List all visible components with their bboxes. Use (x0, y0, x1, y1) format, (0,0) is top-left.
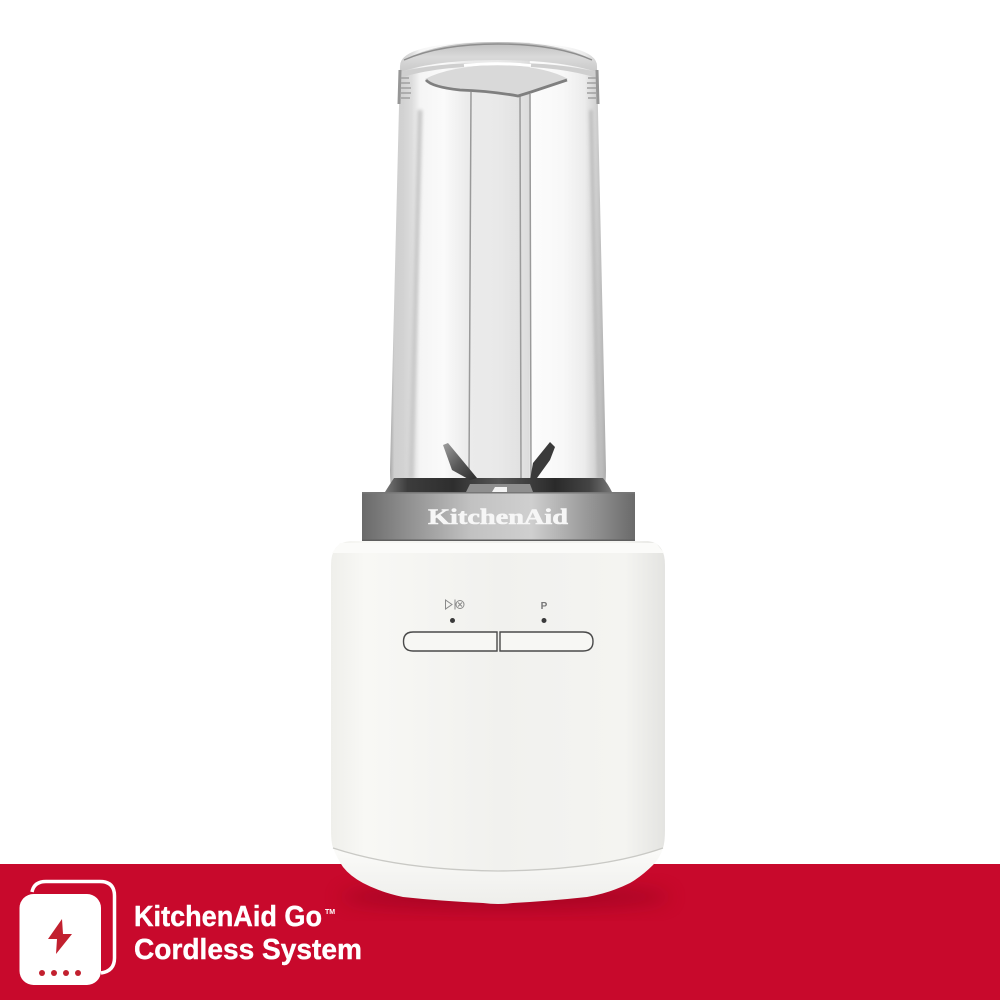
banner title: KitchenAid Go (134, 901, 322, 933)
control buttons (404, 632, 593, 651)
jar rim (400, 42, 597, 72)
control symbols (446, 600, 548, 623)
red banner (0, 864, 1000, 1000)
jar bottom dark band (385, 478, 612, 492)
KitchenAid logo: KitchenAid (428, 504, 568, 529)
metal collar with logo (362, 492, 635, 541)
blender body (331, 541, 665, 904)
blender blades (443, 442, 555, 492)
icon: cordless battery (20, 882, 114, 985)
base shadow (340, 885, 670, 909)
body base (333, 848, 663, 904)
blender jar (385, 42, 612, 492)
banner title: TM (325, 909, 335, 916)
banner title (134, 901, 362, 966)
banner title: Cordless System (134, 934, 362, 966)
control symbols: P (541, 601, 548, 612)
